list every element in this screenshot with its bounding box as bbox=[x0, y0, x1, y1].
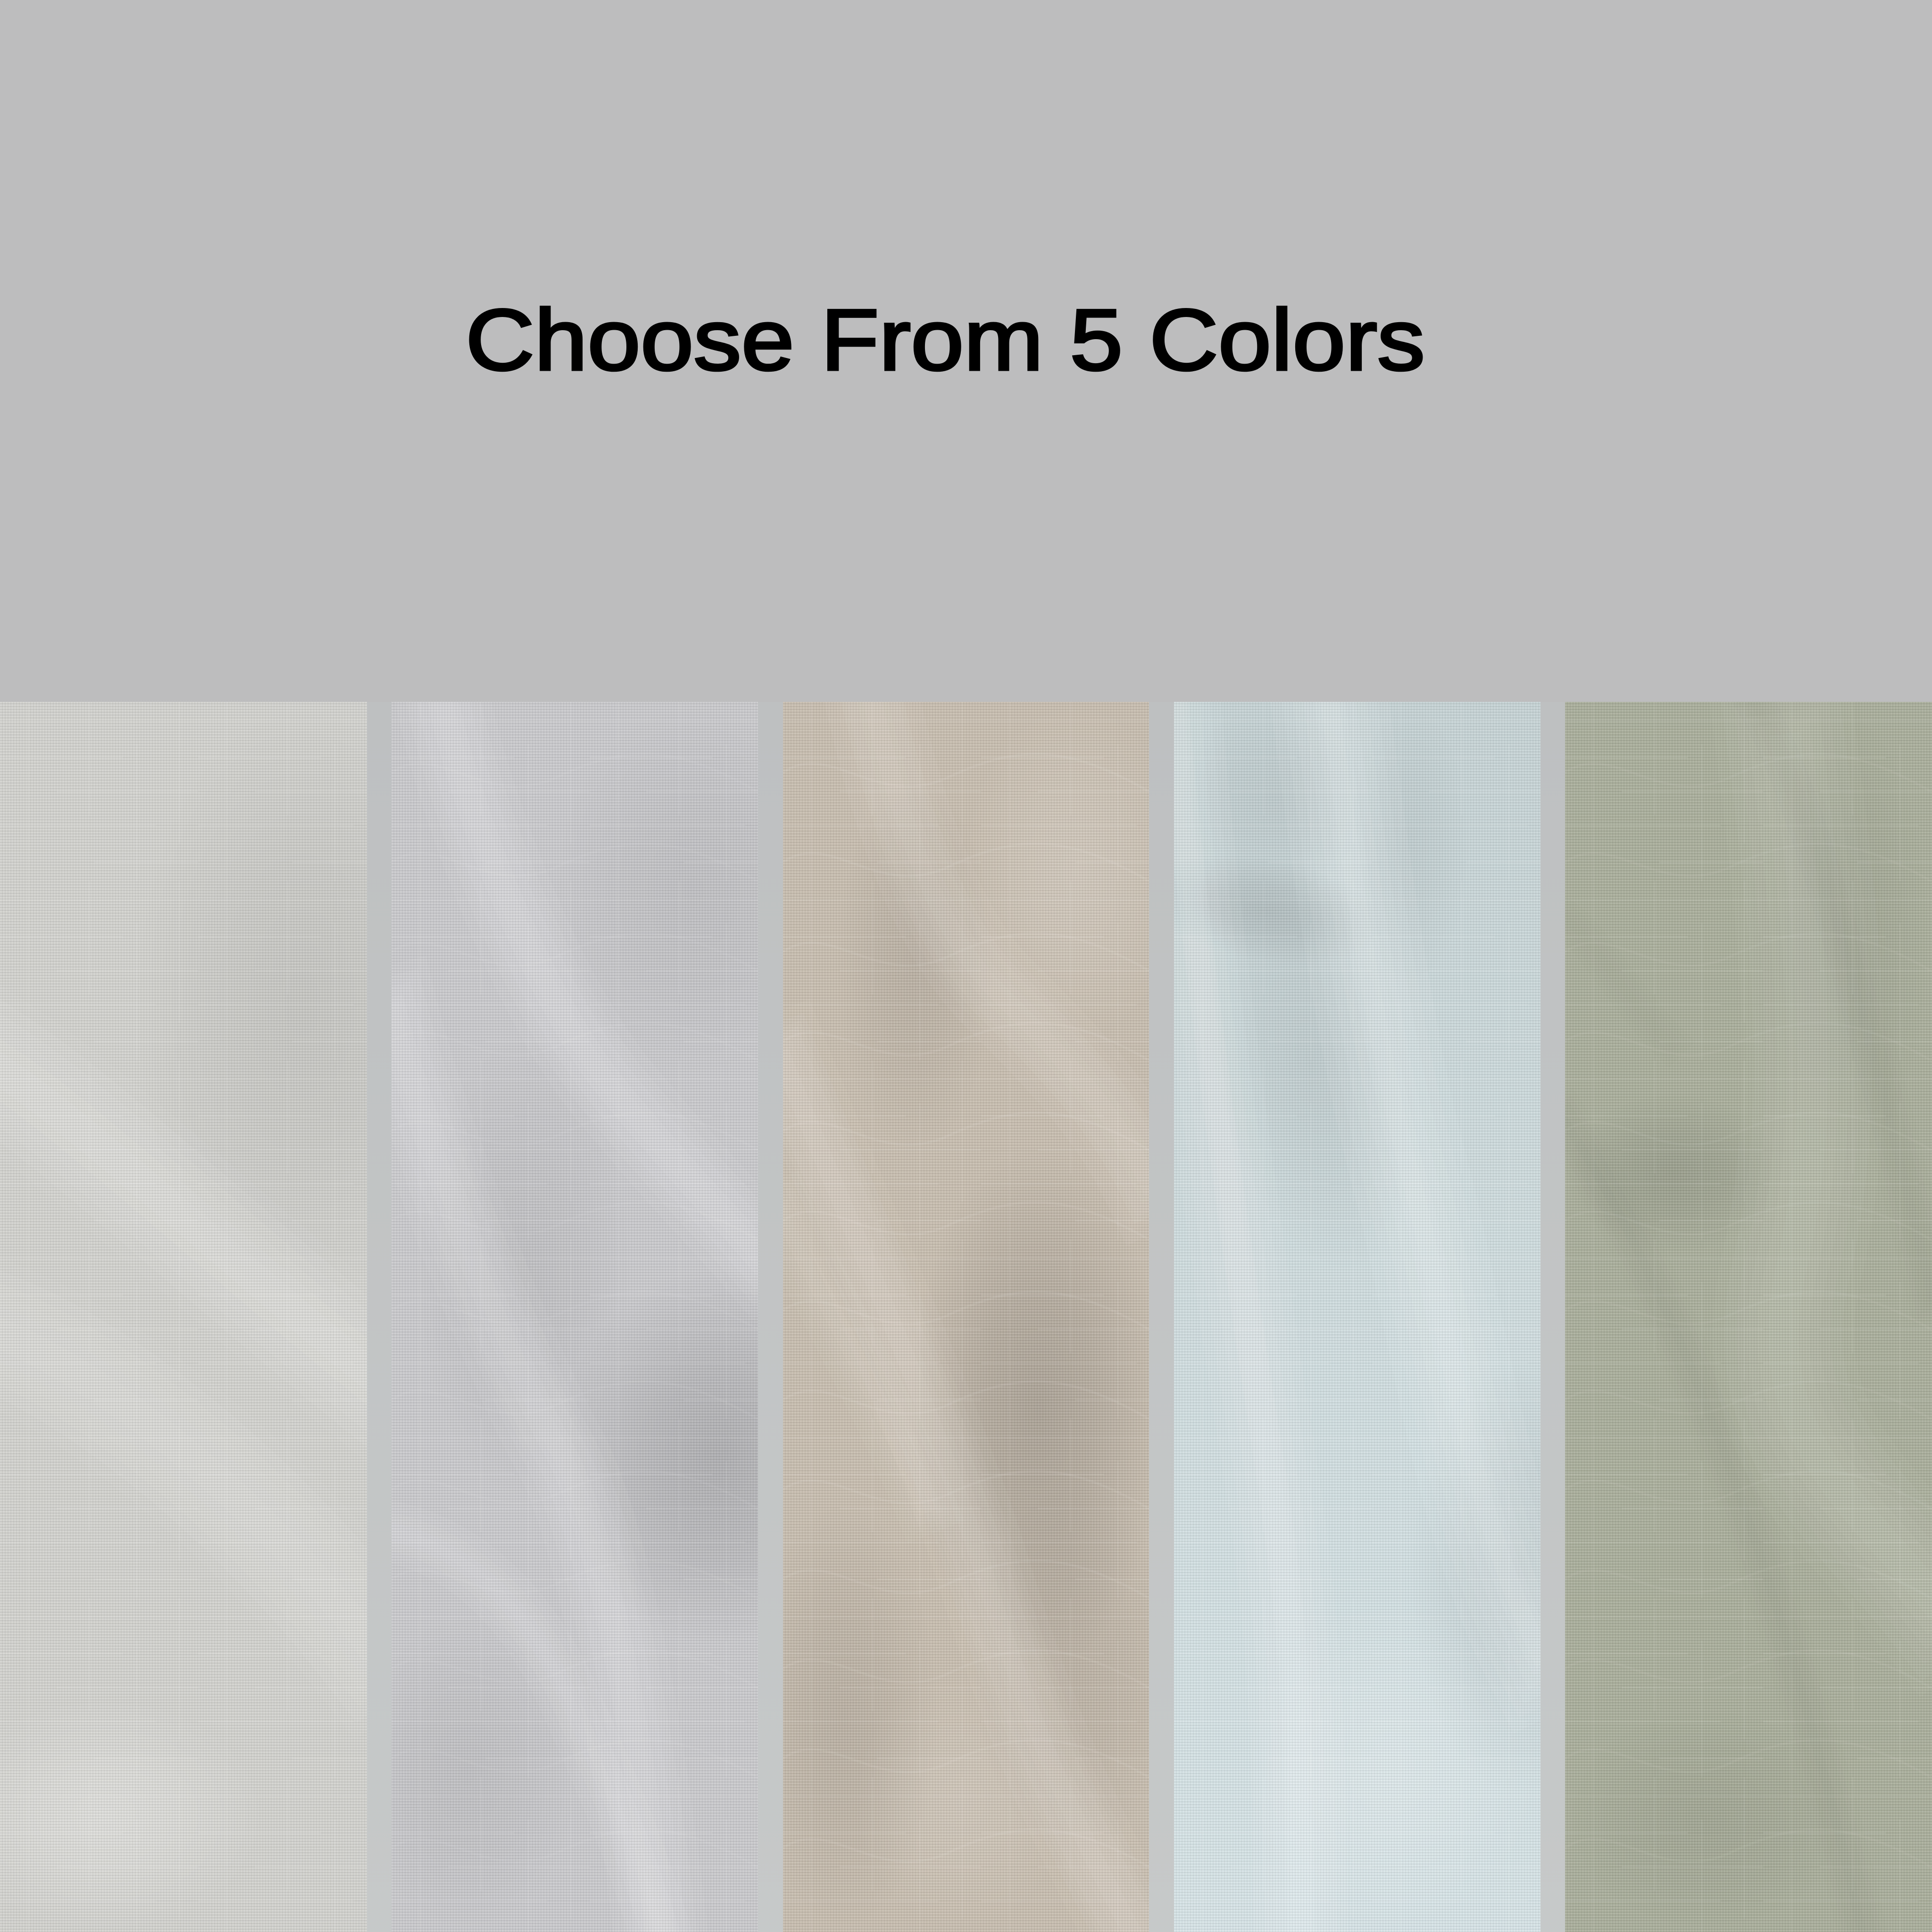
panel: sage green fabric swatch bbox=[1565, 702, 1932, 1932]
panel: silver grey fabric swatch bbox=[354, 702, 877, 1932]
panel: off-white fabric swatch bbox=[0, 702, 472, 1932]
panel: beige fabric swatch bbox=[750, 702, 1189, 1932]
panel: pale blue fabric swatch bbox=[1134, 702, 1627, 1932]
title: Choose From 5 Colors bbox=[466, 291, 1425, 388]
background lower strip bbox=[0, 702, 1932, 1932]
